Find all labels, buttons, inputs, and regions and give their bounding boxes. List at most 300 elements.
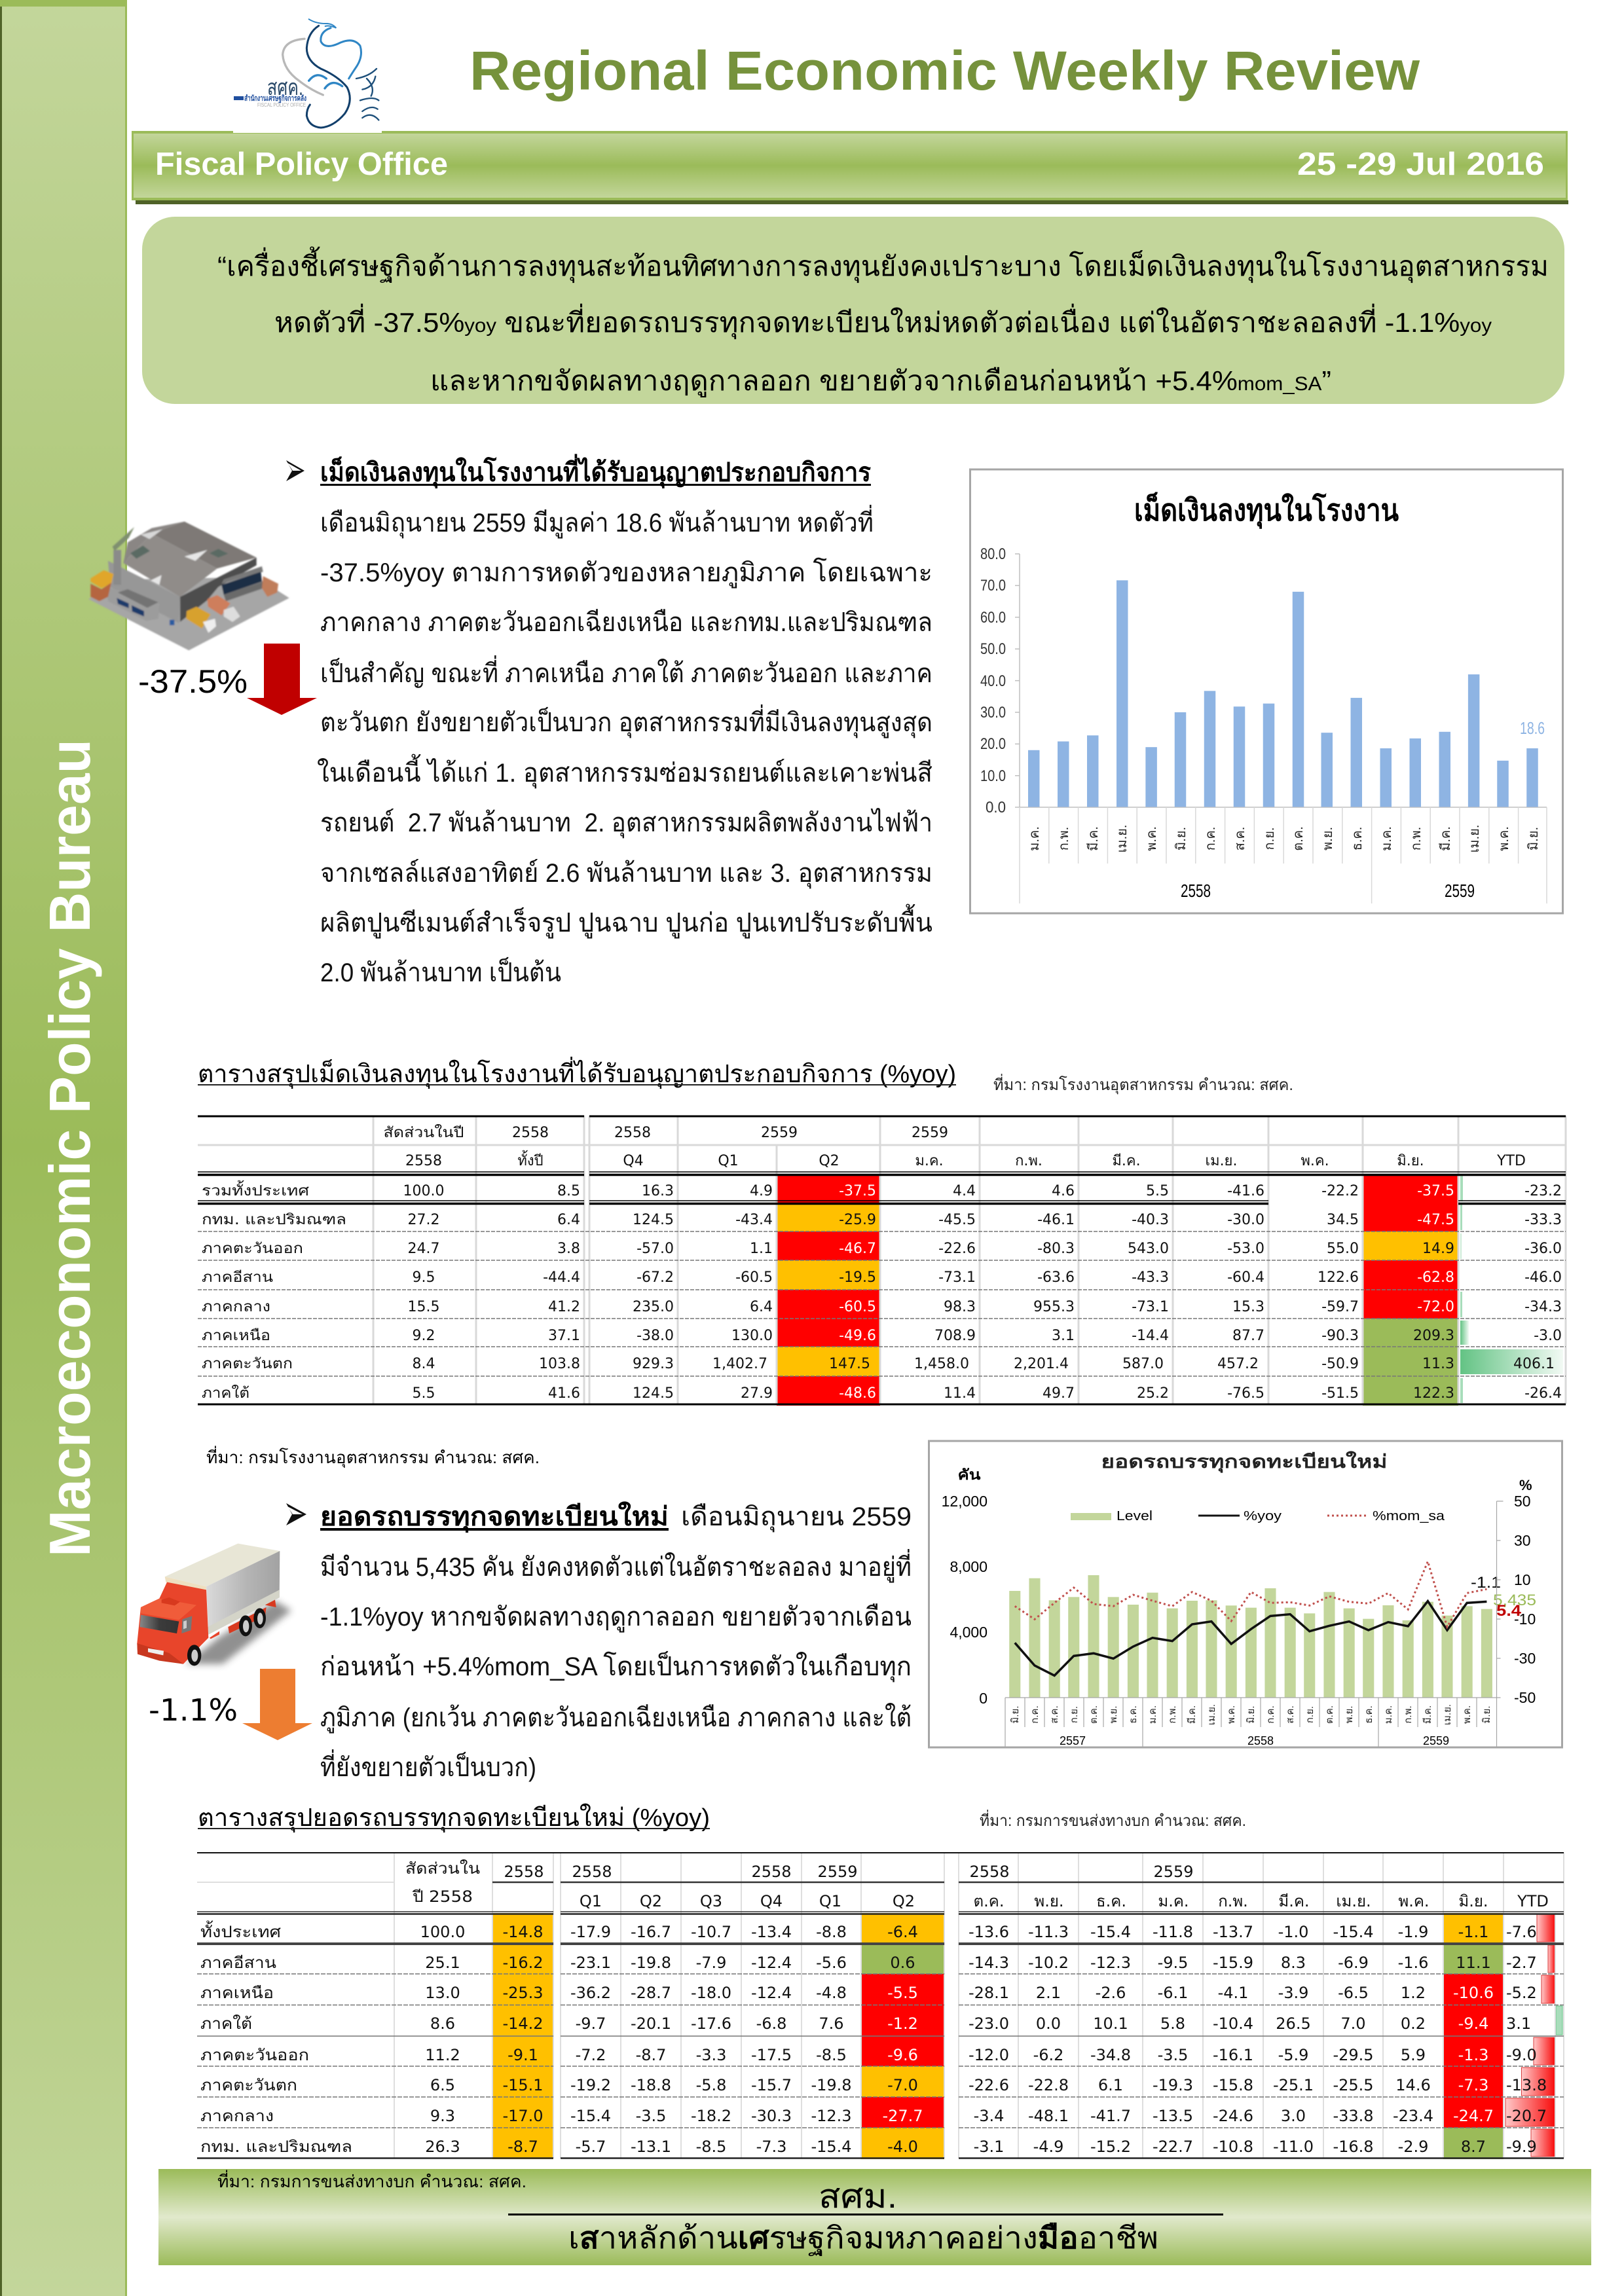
row: Northeast: -1.6 bbox=[1398, 1954, 1428, 1972]
row: South: -1.2 bbox=[887, 2014, 918, 2033]
row: South: 25.2 bbox=[1137, 1385, 1169, 1402]
table header: มี.ค. bbox=[1112, 1153, 1141, 1169]
row: Northeast: ภาคอีสาน bbox=[202, 1269, 273, 1286]
row: whole country: ทั้งประเทศ bbox=[200, 1920, 281, 1941]
row: North: -2.6 bbox=[1096, 1984, 1126, 2002]
row: East: -5.9 bbox=[1278, 2046, 1308, 2064]
row: Central bbox=[202, 1299, 1562, 1315]
row: East: 11.2 bbox=[425, 2046, 460, 2064]
row: Bangkok: -47.5 bbox=[1417, 1212, 1454, 1228]
table header: สัดส่วนใน bbox=[405, 1859, 480, 1878]
data labels: -1.1 bbox=[1471, 1574, 1501, 1592]
row: Bangkok: -9.9 bbox=[1506, 2138, 1537, 2156]
row: Central bbox=[200, 2107, 1547, 2125]
row: Central: -17.0 bbox=[502, 2107, 544, 2125]
row: Bangkok: -30.0 bbox=[1227, 1212, 1264, 1228]
row: North: -4.8 bbox=[816, 1984, 847, 2002]
month labels: ต.ค. bbox=[1291, 826, 1306, 851]
row: Central: 235.0 bbox=[633, 1299, 674, 1315]
table header: เม.ย. bbox=[1206, 1153, 1237, 1169]
row: Central: -72.0 bbox=[1417, 1299, 1454, 1315]
month labels: ก.ย. bbox=[1304, 1706, 1316, 1723]
summary line 3: และหากขจัดผลทางฤดูกาลออก ขยายตัวจากเดือนก่อนหน้า +5.4% mom_SA” bbox=[430, 365, 1331, 397]
row: Central: 9.3 bbox=[430, 2107, 455, 2125]
table header: มิ.ย. bbox=[1397, 1153, 1424, 1169]
table header: ปี 2558 bbox=[412, 1887, 473, 1906]
row: Bangkok bbox=[200, 2138, 1537, 2156]
row: Central: 98.3 bbox=[944, 1299, 976, 1315]
row: North: 2.1 bbox=[1036, 1984, 1061, 2002]
row: North: 1.2 bbox=[1401, 1984, 1426, 2002]
row: Central: 6.4 bbox=[750, 1299, 773, 1315]
table 2 source: ที่มา: กรมการขนส่งทางบก คำนวณ: สศค. bbox=[980, 1810, 1246, 1830]
left axis: 8,000 bbox=[950, 1558, 987, 1575]
month labels: ก.พ. bbox=[1057, 827, 1071, 850]
table header: Q3 bbox=[700, 1892, 722, 1910]
row: North: -6.5 bbox=[1338, 1984, 1369, 2002]
row: East: -9.1 bbox=[507, 2046, 538, 2064]
paragraph: 2.0 พันล้านบาท เป็นต้น bbox=[320, 957, 561, 987]
left axis: คัน bbox=[957, 1467, 981, 1483]
y axis: 10.0 bbox=[980, 767, 1006, 785]
row: East: -22.6 bbox=[938, 1241, 976, 1257]
row: South bbox=[202, 1385, 1562, 1402]
month labels: มี.ค. bbox=[1187, 1705, 1198, 1724]
highlighted cells bbox=[777, 1174, 1563, 1406]
year labels: 2558 bbox=[1181, 881, 1211, 901]
row: South: -26.4 bbox=[1524, 1385, 1562, 1402]
row: South: 0.2 bbox=[1401, 2014, 1426, 2033]
bar chart: factory investment bbox=[970, 469, 1562, 913]
month labels: พ.ค. bbox=[1145, 826, 1159, 851]
month labels: ก.ย. bbox=[1069, 1706, 1080, 1723]
month labels: ม.ค. bbox=[1380, 826, 1394, 851]
row: Central: -41.7 bbox=[1090, 2107, 1131, 2125]
row: whole country: 16.3 bbox=[642, 1183, 674, 1199]
row: South: 5.8 bbox=[1160, 2014, 1185, 2033]
y axis: 80.0 bbox=[980, 545, 1006, 563]
y axis: 40.0 bbox=[980, 672, 1006, 690]
row: Central: -20.7 bbox=[1506, 2107, 1547, 2125]
row: Bangkok: -22.7 bbox=[1153, 2138, 1193, 2156]
yoy line bbox=[1015, 1601, 1486, 1675]
paragraph: ภูมิภาค (ยกเว้น ภาคตะวันออกเฉียงเหนือ ภาคกลาง และใต้ bbox=[320, 1702, 912, 1733]
month labels: ก.พ. bbox=[1409, 827, 1424, 850]
row: South bbox=[200, 2014, 1531, 2033]
row: West: 2,201.4 bbox=[1014, 1356, 1069, 1372]
month labels: ส.ค. bbox=[1233, 827, 1247, 850]
row: North: 37.1 bbox=[548, 1328, 580, 1344]
month labels: เม.ย. bbox=[1206, 1704, 1217, 1725]
row: East: -3.3 bbox=[696, 2046, 726, 2064]
row: Bangkok: -11.0 bbox=[1273, 2138, 1314, 2156]
data labels: 5.4 bbox=[1496, 1602, 1522, 1620]
table header: 2559 bbox=[817, 1863, 858, 1881]
row: North: 87.7 bbox=[1232, 1328, 1264, 1344]
month labels: ก.ย. bbox=[1263, 828, 1277, 850]
row: Northeast bbox=[202, 1269, 1562, 1286]
paragraph: ในเดือนนี้ ได้แก่ 1. อุตสาหกรรมซ่อมรถยนต์และเคาะพ่นสี bbox=[317, 754, 932, 789]
row: Northeast: -44.4 bbox=[543, 1269, 580, 1286]
row: Bangkok: -45.5 bbox=[938, 1212, 976, 1228]
right axis: 50 bbox=[1514, 1493, 1531, 1510]
row: West: 147.5 bbox=[829, 1356, 870, 1372]
row: Central: -18.2 bbox=[691, 2107, 731, 2125]
row: East: -29.5 bbox=[1333, 2046, 1374, 2064]
row: West bbox=[202, 1356, 1555, 1372]
row: Northeast: 8.3 bbox=[1281, 1954, 1306, 1972]
row: Bangkok: -10.8 bbox=[1213, 2138, 1253, 2156]
row: East: -80.3 bbox=[1037, 1241, 1075, 1257]
left axis: 12,000 bbox=[942, 1493, 987, 1510]
table header: YTD bbox=[1496, 1153, 1526, 1169]
row: South: 3.1 bbox=[1506, 2014, 1531, 2033]
row: East: -57.0 bbox=[637, 1241, 674, 1257]
table 1 heading: ตารางสรุปเม็ดเงินลงทุนในโรงงานที่ได้รับอนุญาตประกอบกิจการ (%yoy) bbox=[198, 1057, 956, 1089]
left axis: 4,000 bbox=[950, 1624, 987, 1641]
row: South: -20.1 bbox=[631, 2014, 671, 2033]
row: South: 10.1 bbox=[1093, 2014, 1128, 2033]
table header: Q4 bbox=[623, 1153, 644, 1169]
chart title: เม็ดเงินลงทุนในโรงงาน bbox=[1134, 492, 1399, 529]
row: Central: ภาคกลาง bbox=[200, 2107, 274, 2125]
row: Northeast: 25.1 bbox=[425, 1954, 460, 1972]
paragraph: ที่ยังขยายตัวเป็นบวก) bbox=[320, 1749, 536, 1782]
row: Northeast: -14.3 bbox=[969, 1954, 1009, 1972]
left axis bbox=[942, 1467, 987, 1707]
footer band bbox=[158, 2169, 1591, 2265]
table 2: truck registrations %yoy bbox=[197, 1852, 1564, 2159]
row: Central: -60.5 bbox=[839, 1299, 876, 1315]
row: Central: -73.1 bbox=[1132, 1299, 1169, 1315]
table header: 2558 bbox=[405, 1153, 442, 1169]
month labels: ก.ค. bbox=[1265, 1705, 1276, 1724]
table 1 source note: ที่มา: กรมโรงงานอุตสาหกรรม คำนวณ: สศค. bbox=[206, 1446, 540, 1468]
row: Bangkok: 124.5 bbox=[633, 1212, 674, 1228]
month labels bbox=[1027, 825, 1541, 852]
table header: 2559 bbox=[1153, 1863, 1194, 1881]
mom line bbox=[1015, 1561, 1486, 1627]
row: West: 929.3 bbox=[633, 1356, 674, 1372]
row: whole country: 4.4 bbox=[953, 1183, 976, 1199]
month labels: มิ.ย. bbox=[1526, 827, 1541, 850]
row: South: ภาคใต้ bbox=[200, 2014, 252, 2033]
row: Bangkok: -2.9 bbox=[1398, 2138, 1428, 2156]
combo chart: truck registrations bbox=[929, 1441, 1562, 1747]
row: Bangkok: -15.4 bbox=[811, 2138, 852, 2156]
y axis: 20.0 bbox=[980, 735, 1006, 753]
row: North: -12.4 bbox=[751, 1984, 792, 2002]
month labels: ต.ค. bbox=[1324, 1705, 1335, 1724]
table header: 2558 bbox=[512, 1125, 549, 1141]
table header: Q2 bbox=[819, 1153, 840, 1169]
table grid bbox=[198, 1116, 1566, 1404]
row: whole country: -15.4 bbox=[1333, 1923, 1374, 1941]
logo org name: สำนักงานเศรษฐกิจการคลัง bbox=[244, 94, 306, 103]
row: Northeast: 122.6 bbox=[1318, 1269, 1359, 1286]
row: North: -28.7 bbox=[631, 1984, 671, 2002]
sidebar bbox=[0, 0, 127, 2296]
row: West: -25.5 bbox=[1333, 2076, 1374, 2094]
row: South: -10.4 bbox=[1213, 2014, 1253, 2033]
right axis bbox=[1514, 1477, 1536, 1706]
row: North: -3.9 bbox=[1278, 1984, 1308, 2002]
row: East: -34.8 bbox=[1090, 2046, 1131, 2064]
month labels: มิ.ย. bbox=[1246, 1705, 1257, 1724]
year labels: 2557 bbox=[1060, 1734, 1086, 1747]
row: Bangkok: 27.2 bbox=[408, 1212, 439, 1228]
row: Central: 15.3 bbox=[1232, 1299, 1264, 1315]
row: whole country: 100.0 bbox=[403, 1183, 444, 1199]
row: West: 587.0 bbox=[1122, 1356, 1164, 1372]
row: South: 122.3 bbox=[1413, 1385, 1454, 1402]
arrow: orange down bbox=[242, 1669, 312, 1740]
month labels: ส.ค. bbox=[1285, 1705, 1296, 1724]
month labels: พ.ย. bbox=[1321, 827, 1335, 850]
footer source note: ที่มา: กรมการขนส่งทางบก คำนวณ: สศค. bbox=[217, 2170, 526, 2191]
row: whole country: -17.9 bbox=[570, 1923, 611, 1941]
month labels: เม.ย. bbox=[1115, 825, 1130, 852]
row: North: -28.1 bbox=[969, 1984, 1009, 2002]
row: Northeast: -7.9 bbox=[696, 1954, 726, 1972]
row: South: 5.5 bbox=[413, 1385, 435, 1402]
table header: Q1 bbox=[819, 1892, 841, 1910]
y axis: 0.0 bbox=[986, 799, 1006, 816]
row: South: -48.6 bbox=[839, 1385, 876, 1402]
row: West: 6.5 bbox=[430, 2076, 455, 2094]
row: Northeast: -19.5 bbox=[839, 1269, 876, 1286]
table header: YTD bbox=[1517, 1892, 1549, 1910]
row: Central: -24.7 bbox=[1453, 2107, 1494, 2125]
row: South: 8.6 bbox=[430, 2014, 455, 2033]
month labels: มี.ค. bbox=[1422, 1705, 1433, 1724]
table header: Q2 bbox=[893, 1892, 915, 1910]
row: Northeast: -10.2 bbox=[1028, 1954, 1069, 1972]
table header: 2558 bbox=[969, 1863, 1010, 1881]
y axis: 70.0 bbox=[980, 577, 1006, 594]
row: North: -5.5 bbox=[887, 1984, 918, 2002]
table header: ธ.ค. bbox=[1096, 1892, 1126, 1910]
row: Northeast bbox=[200, 1954, 1537, 1972]
level bars bbox=[1009, 1575, 1492, 1698]
row: West: -19.2 bbox=[570, 2076, 611, 2094]
row: Northeast: -60.5 bbox=[735, 1269, 773, 1286]
row: East: -9.6 bbox=[887, 2046, 918, 2064]
row: North: -3.0 bbox=[1534, 1328, 1562, 1344]
row: Central: ภาคกลาง bbox=[202, 1299, 270, 1315]
summary line 1: “เครื่องชี้เศรษฐกิจด้านการลงทุนสะท้อนทิศทางการลงทุนยังคงเปราะบาง โดยเม็ดเงินลงทุนในโรงงานอุตสาหกรรม bbox=[217, 246, 1549, 283]
row: Central: -15.4 bbox=[570, 2107, 611, 2125]
y axis: 60.0 bbox=[980, 609, 1006, 627]
month labels: พ.ย. bbox=[1108, 1705, 1119, 1724]
row: North: 13.0 bbox=[425, 1984, 460, 2002]
row: North: 3.1 bbox=[1052, 1328, 1075, 1344]
section: factory investment text bbox=[286, 454, 932, 987]
row: whole country: 100.0 bbox=[420, 1923, 465, 1941]
row: Bangkok: -16.8 bbox=[1333, 2138, 1374, 2156]
paragraph: -1.1%yoy หากขจัดผลทางฤดูกาลออก ขยายตัวจากเดือน bbox=[320, 1603, 912, 1632]
y axis bbox=[980, 545, 1547, 816]
year labels bbox=[1060, 1734, 1449, 1747]
row: Central: -48.1 bbox=[1028, 2107, 1069, 2125]
row: Bangkok: -43.4 bbox=[735, 1212, 773, 1228]
row: Central: -34.3 bbox=[1524, 1299, 1562, 1315]
row: Northeast: -6.9 bbox=[1338, 1954, 1369, 1972]
table header: ทั้งปี bbox=[517, 1150, 544, 1169]
row: whole country: -13.7 bbox=[1213, 1923, 1253, 1941]
row: North: -90.3 bbox=[1321, 1328, 1359, 1344]
row: whole country: -13.4 bbox=[751, 1923, 792, 1941]
year labels: 2559 bbox=[1423, 1734, 1449, 1747]
right axis: -30 bbox=[1514, 1650, 1536, 1667]
month labels: ม.ค. bbox=[1383, 1705, 1394, 1724]
row: West: 6.1 bbox=[1098, 2076, 1123, 2094]
row: Central: -3.5 bbox=[636, 2107, 666, 2125]
row: North: -14.4 bbox=[1132, 1328, 1169, 1344]
row: North: ภาคเหนือ bbox=[200, 1984, 274, 2002]
row: West: -13.8 bbox=[1506, 2076, 1547, 2094]
row: Central: -13.5 bbox=[1153, 2107, 1193, 2125]
section: truck registration text bbox=[286, 1501, 912, 1782]
logo bbox=[233, 13, 382, 133]
row: whole country: -11.8 bbox=[1153, 1923, 1193, 1941]
row: Bangkok: -13.1 bbox=[631, 2138, 671, 2156]
row: North: -18.0 bbox=[691, 1984, 731, 2002]
table grid bbox=[197, 1852, 1564, 2158]
month labels: ก.ค. bbox=[1204, 827, 1218, 850]
data labels bbox=[1471, 1574, 1536, 1620]
row: North: 9.2 bbox=[413, 1328, 435, 1344]
right axis: % bbox=[1519, 1477, 1532, 1493]
table header: 2559 bbox=[761, 1125, 798, 1141]
row: whole country: -8.8 bbox=[816, 1923, 847, 1941]
row: South: 26.5 bbox=[1276, 2014, 1311, 2033]
row: whole country: -6.4 bbox=[887, 1923, 918, 1941]
row: Northeast: -15.9 bbox=[1213, 1954, 1253, 1972]
row: Central: 955.3 bbox=[1033, 1299, 1075, 1315]
row: South: -23.0 bbox=[969, 2014, 1009, 2033]
row: South: 41.6 bbox=[548, 1385, 580, 1402]
sidebar title: Macroeconomic Policy Bureau bbox=[37, 739, 102, 1557]
row: Bangkok: 8.7 bbox=[1461, 2138, 1486, 2156]
table header: Q1 bbox=[580, 1892, 602, 1910]
row: whole country: -13.6 bbox=[969, 1923, 1009, 1941]
factory change value: -37.5% bbox=[138, 663, 248, 700]
legend: %yoy bbox=[1244, 1509, 1282, 1523]
row: whole country bbox=[200, 1920, 1537, 1941]
row: Central: -27.7 bbox=[882, 2107, 923, 2125]
month labels: มิ.ย. bbox=[1481, 1705, 1492, 1724]
row: East: -8.5 bbox=[816, 2046, 847, 2064]
table header: พ.ค. bbox=[1398, 1892, 1430, 1910]
paragraph: เดือนมิถุนายน 2559 bbox=[681, 1503, 912, 1533]
paragraph: ผลิตปูนซีเมนต์สำเร็จรูป ปูนฉาบ ปูนก่อ ปูนเทปรับระดับพื้น bbox=[320, 903, 932, 938]
logo english: FISCAL POLICY OFFICE bbox=[257, 102, 306, 108]
row: North: -4.1 bbox=[1218, 1984, 1248, 2002]
paragraph: จากเซลล์แสงอาทิตย์ 2.6 พันล้านบาท และ 3. อุตสาหกรรม bbox=[320, 858, 932, 889]
row: Northeast: 9.5 bbox=[413, 1269, 435, 1286]
row: South: -14.2 bbox=[502, 2014, 544, 2033]
row: North: -6.1 bbox=[1158, 1984, 1188, 2002]
paragraph: มีจำนวน 5,435 คัน ยังคงหดตัวแต่ในอัตราชะลอลง มาอยู่ที่ bbox=[320, 1549, 912, 1582]
legend: Level bbox=[1116, 1509, 1153, 1523]
row: Northeast: -67.2 bbox=[637, 1269, 674, 1286]
table header: พ.ค. bbox=[1301, 1153, 1329, 1169]
row: Northeast: -46.0 bbox=[1524, 1269, 1562, 1286]
row: West: -18.8 bbox=[631, 2076, 671, 2094]
row: East: -12.0 bbox=[969, 2046, 1009, 2064]
icon: bullet arrow bbox=[286, 460, 304, 481]
paragraph bbox=[320, 1503, 912, 1782]
row: Central: -12.3 bbox=[811, 2107, 852, 2125]
row: whole country: 4.6 bbox=[1052, 1183, 1075, 1199]
row: whole country: 8.5 bbox=[557, 1183, 580, 1199]
row: Central: -3.4 bbox=[974, 2107, 1004, 2125]
row: Northeast: 11.1 bbox=[1456, 1954, 1491, 1972]
row: South: 11.4 bbox=[944, 1385, 976, 1402]
table header: 2559 bbox=[912, 1125, 948, 1141]
month labels: ต.ค. bbox=[1088, 1705, 1099, 1724]
row: South: 124.5 bbox=[633, 1385, 674, 1402]
row: whole country: -1.9 bbox=[1398, 1923, 1428, 1941]
table header bbox=[384, 1124, 1526, 1169]
table header: ก.พ. bbox=[1015, 1153, 1043, 1169]
row: East: -6.2 bbox=[1033, 2046, 1063, 2064]
row: whole country: -15.4 bbox=[1090, 1923, 1131, 1941]
month labels: พ.ค. bbox=[1497, 826, 1511, 851]
row: Northeast: -5.6 bbox=[816, 1954, 847, 1972]
row: East: 543.0 bbox=[1128, 1241, 1169, 1257]
row: East: ภาคตะวันออก bbox=[202, 1241, 303, 1257]
month labels: ม.ค. bbox=[1027, 826, 1042, 851]
table header: ก.พ. bbox=[1218, 1892, 1248, 1910]
row: Northeast: -12.4 bbox=[751, 1954, 792, 1972]
row: whole country: รวมทั้งประเทศ bbox=[202, 1180, 309, 1199]
row: whole country: -11.3 bbox=[1028, 1923, 1069, 1941]
row: Northeast: -16.2 bbox=[502, 1954, 544, 1972]
row: East bbox=[200, 2046, 1537, 2064]
title: Regional Economic Weekly Review bbox=[470, 40, 1420, 101]
row: South: -9.4 bbox=[1458, 2014, 1488, 2033]
paragraph: รถยนต์ 2.7 พันล้านบาท 2. อุตสาหกรรมผลิตพลังงานไฟฟ้า bbox=[320, 808, 932, 839]
row: East: -46.7 bbox=[839, 1241, 876, 1257]
row: West: 103.8 bbox=[539, 1356, 580, 1372]
row: East: ภาคตะวันออก bbox=[200, 2046, 309, 2064]
paragraph: ตะวันตก ยังขยายตัวเป็นบวก อุตสาหกรรมที่มีเงินลงทุนสูงสุด bbox=[320, 704, 932, 738]
row: North bbox=[202, 1328, 1562, 1344]
right axis: -10 bbox=[1514, 1611, 1536, 1628]
table header: Q1 bbox=[718, 1153, 739, 1169]
summary box bbox=[142, 217, 1564, 404]
band left text: Fiscal Policy Office bbox=[155, 147, 448, 182]
row: West: -15.8 bbox=[1213, 2076, 1253, 2094]
row: East: -17.5 bbox=[751, 2046, 792, 2064]
month labels: ม.ค. bbox=[1147, 1705, 1158, 1724]
footer slogan: เสาหลักด้าน เศรษฐกิจมหภาคอย่าง มืออาชีพ bbox=[568, 2221, 1158, 2256]
table header: ต.ค. bbox=[974, 1892, 1004, 1910]
row: East: 55.0 bbox=[1327, 1241, 1359, 1257]
row: Bangkok: -8.5 bbox=[696, 2138, 726, 2156]
month labels: ก.พ. bbox=[1403, 1705, 1414, 1724]
table 1: factory investment %yoy bbox=[198, 1116, 1566, 1406]
row: East: 1.1 bbox=[750, 1241, 773, 1257]
paragraph: เดือนมิถุนายน 2559 มีมูลค่า 18.6 พันล้านบาท หดตัวที่ bbox=[320, 505, 874, 539]
row: Northeast: ภาคอีสาน bbox=[200, 1954, 276, 1972]
category separators bbox=[1020, 807, 1547, 903]
row: Central: -23.4 bbox=[1393, 2107, 1433, 2125]
table 1 source: ที่มา: กรมโรงงานอุตสาหกรรม คำนวณ: สศค. bbox=[993, 1074, 1293, 1095]
row: West: 11.3 bbox=[1422, 1356, 1454, 1372]
